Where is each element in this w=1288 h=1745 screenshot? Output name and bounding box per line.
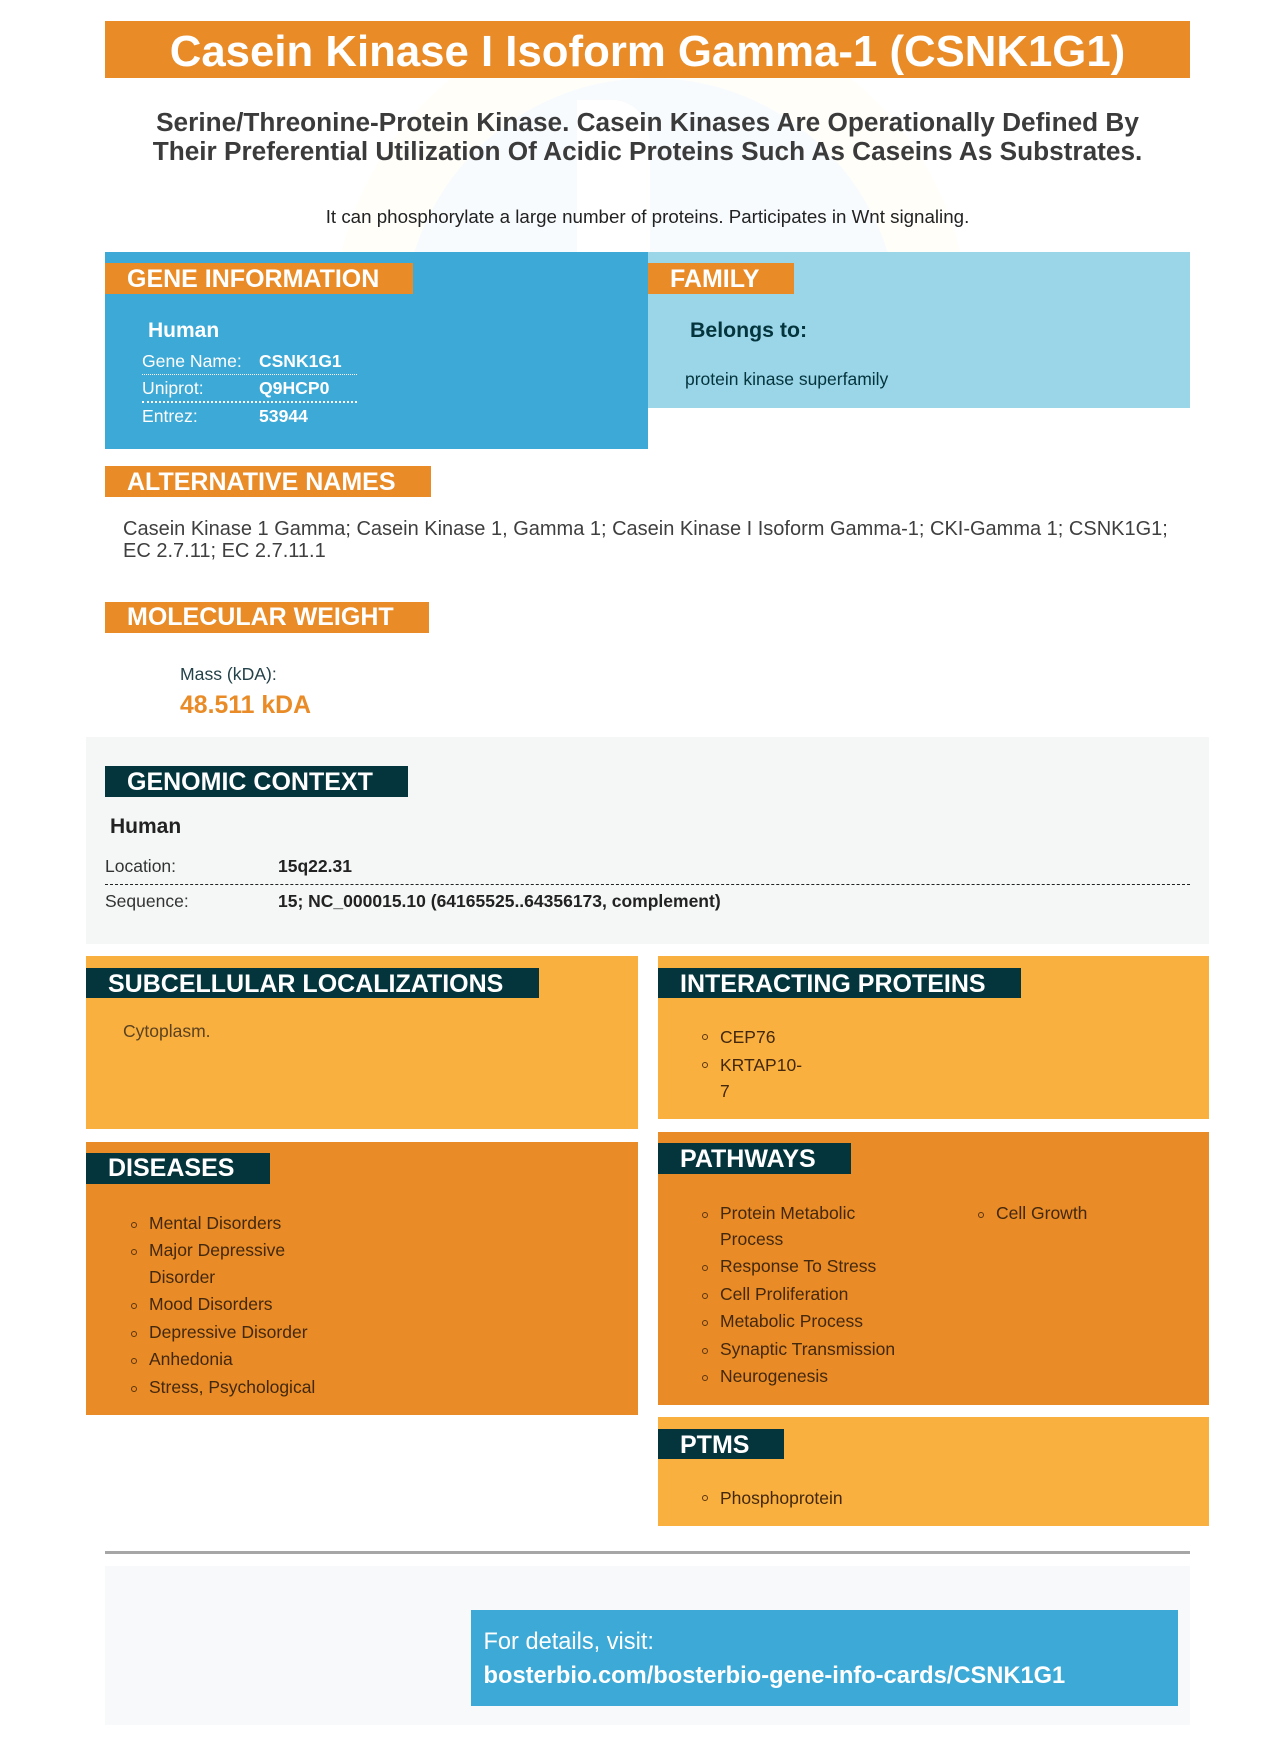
panel: genomic context bbox=[86, 737, 1209, 944]
panel: gene information bbox=[105, 252, 648, 449]
disease list: Depressive Disorder bbox=[149, 1322, 308, 1342]
alternative names text bbox=[123, 518, 1168, 562]
heading: molecular weight: MOLECULAR WEIGHT bbox=[127, 603, 394, 631]
disease list: Major Depressive bbox=[149, 1240, 285, 1260]
entrez row: Entrez: bbox=[142, 406, 198, 426]
heading: gene information: GENE INFORMATION bbox=[127, 265, 379, 293]
heading: family bbox=[648, 263, 794, 294]
alternative names text: Casein Kinase 1 Gamma; Casein Kinase 1, Gamma 1; Casein Kinase I Isoform Gamma-1; CKI-Gamma 1; CSNK1G1; bbox=[123, 518, 1168, 540]
pathway list: Protein Metabolic bbox=[720, 1203, 855, 1223]
location row: 15q22.31 bbox=[278, 856, 352, 876]
ptm list: Phosphoprotein bbox=[720, 1488, 843, 1508]
protein list: CEP76 bbox=[720, 1027, 775, 1047]
heading: family: FAMILY bbox=[670, 265, 759, 293]
pathway list: Synaptic Transmission bbox=[720, 1339, 895, 1359]
watermark logo bbox=[0, 78, 1288, 252]
panel: diseases bbox=[86, 1142, 638, 1415]
panel: family bbox=[648, 252, 1190, 408]
callout label: For details, visit: bbox=[484, 1629, 654, 1655]
mass label: Mass (kDA): bbox=[180, 664, 277, 684]
pathway list: Neurogenesis bbox=[720, 1366, 828, 1386]
callout url: bosterbio.com/bosterbio-gene-info-cards/CSNK1G1 bbox=[484, 1663, 1065, 1689]
subtitle bbox=[153, 107, 1142, 166]
family value: protein kinase superfamily bbox=[685, 369, 888, 389]
disease list: Mental Disorders bbox=[149, 1213, 281, 1233]
sequence row: Sequence: bbox=[105, 891, 189, 911]
heading: pathways: PATHWAYS bbox=[680, 1145, 816, 1173]
uniprot row: Q9HCP0 bbox=[259, 378, 329, 398]
entrez row: 53944 bbox=[259, 406, 308, 426]
pathway list: Process bbox=[720, 1229, 783, 1249]
protein list: KRTAP10- bbox=[720, 1055, 802, 1075]
species label: Human bbox=[110, 815, 181, 838]
pathway list: Response To Stress bbox=[720, 1256, 876, 1276]
species label: Human bbox=[148, 319, 219, 342]
alternative names text: EC 2.7.11; EC 2.7.11.1 bbox=[123, 540, 326, 562]
belongs to label: Belongs to: bbox=[690, 318, 807, 342]
panel: subcellular localizations bbox=[86, 956, 638, 1129]
protein list: 7 bbox=[720, 1081, 730, 1101]
heading: diseases bbox=[86, 1153, 270, 1184]
sequence row: 15; NC_000015.10 (64165525..64356173, complement) bbox=[278, 891, 721, 911]
heading: ptms: PTMS bbox=[680, 1431, 749, 1459]
panel: pathways bbox=[658, 1132, 1209, 1405]
heading: pathways bbox=[658, 1143, 851, 1174]
pathway list: Metabolic Process bbox=[720, 1311, 863, 1331]
disease list: Anhedonia bbox=[149, 1349, 233, 1369]
uniprot row: Uniprot: bbox=[142, 378, 204, 398]
subtitle: Serine/Threonine-Protein Kinase. Casein Kinases Are Operationally Defined By bbox=[156, 107, 1139, 137]
heading: diseases: DISEASES bbox=[108, 1154, 234, 1182]
gene name row: Gene Name: bbox=[142, 351, 242, 371]
title banner: Casein Kinase I Isoform Gamma-1 (CSNK1G1) bbox=[170, 27, 1125, 76]
panel: interacting proteins bbox=[658, 956, 1209, 1119]
gene name row: CSNK1G1 bbox=[259, 351, 342, 371]
localization text: Cytoplasm. bbox=[123, 1021, 211, 1041]
pathway list: Cell Growth bbox=[996, 1203, 1087, 1223]
location row bbox=[105, 854, 1190, 885]
mass value: 48.511 kDA bbox=[180, 692, 311, 719]
pathway list: Cell Proliferation bbox=[720, 1284, 848, 1304]
description: It can phosphorylate a large number of proteins. Participates in Wnt signaling. bbox=[326, 206, 969, 227]
callout: details link bbox=[471, 1610, 1178, 1706]
disease list: Disorder bbox=[149, 1267, 215, 1287]
location row: Location: bbox=[105, 856, 176, 876]
heading: ptms bbox=[658, 1429, 784, 1459]
disease list: Mood Disorders bbox=[149, 1294, 273, 1314]
heading: interacting proteins: INTERACTING PROTEINS bbox=[680, 970, 986, 998]
subtitle: Their Preferential Utilization Of Acidic Proteins Such As Caseins As Substrates. bbox=[153, 136, 1142, 166]
uniprot row bbox=[142, 376, 357, 403]
section: molecular weight bbox=[105, 602, 429, 719]
panel: ptms bbox=[658, 1417, 1209, 1526]
protein list bbox=[702, 1027, 802, 1101]
disease list bbox=[131, 1213, 315, 1397]
heading: genomic context: GENOMIC CONTEXT bbox=[127, 768, 373, 796]
panel: footer bbox=[105, 1566, 1190, 1725]
heading: subcellular localizations: SUBCELLULAR LOCALIZATIONS bbox=[108, 970, 503, 998]
pathway list bbox=[702, 1203, 1087, 1386]
entrez row bbox=[142, 406, 308, 426]
gene name row bbox=[142, 349, 357, 375]
section: alternative names bbox=[105, 466, 1168, 562]
disease list: Stress, Psychological bbox=[149, 1377, 315, 1397]
heading: alternative names: ALTERNATIVE NAMES bbox=[127, 468, 396, 496]
